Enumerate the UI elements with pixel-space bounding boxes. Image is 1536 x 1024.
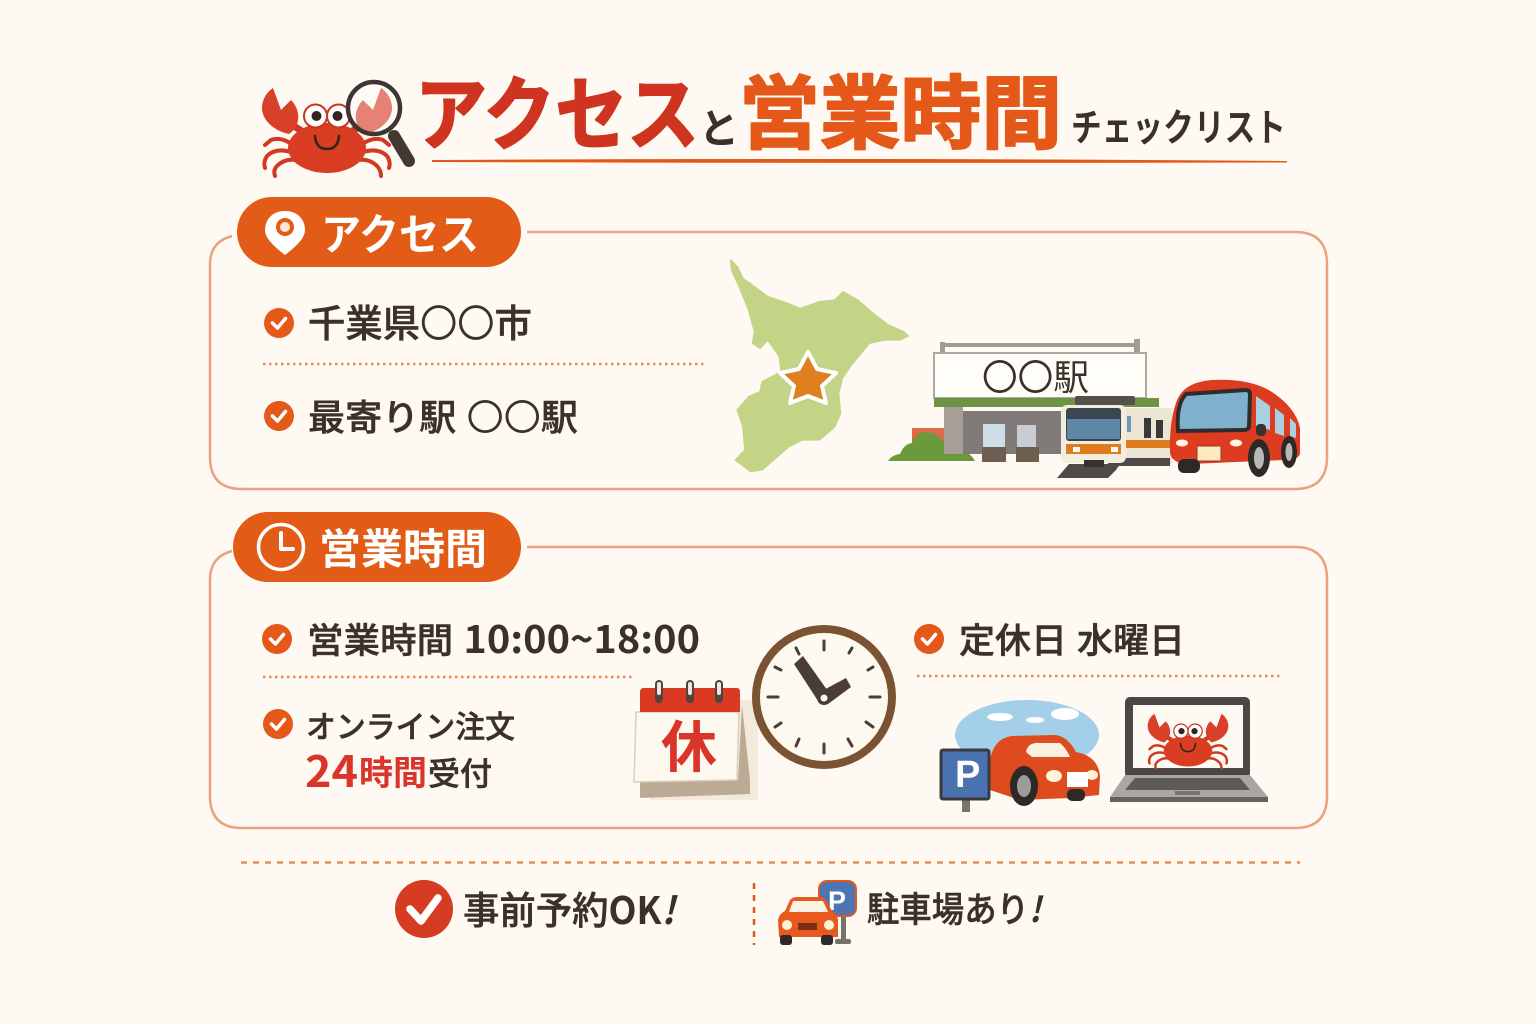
title — [262, 70, 1287, 176]
icon: parking and car — [941, 700, 1100, 812]
icon: closed-day calendar: 休 — [661, 716, 717, 779]
icon: laptop with crab — [1110, 697, 1268, 802]
footer: parking available — [778, 881, 1044, 945]
title text: 営業時間: 営業時間 — [739, 70, 1062, 159]
title text: と: と — [699, 106, 739, 152]
bus illustration — [1170, 380, 1300, 477]
access heading pill — [237, 197, 521, 267]
icon: crab with magnifying glass — [262, 82, 409, 176]
icon: car with parking sign: P — [828, 886, 846, 916]
icon: map pin — [265, 211, 305, 255]
panel: access — [210, 197, 1327, 489]
online orders row — [263, 709, 515, 800]
title text: チェックリスト: チェックリスト — [1071, 108, 1286, 150]
icon: check badge — [395, 880, 453, 938]
advance booking text: 事前予約OK! — [463, 880, 679, 935]
online orders row: 受付 — [428, 756, 492, 792]
opening hours row: 営業時間 10:00~18:00 — [307, 609, 700, 664]
online orders row: 24 — [305, 738, 358, 800]
icon: clock — [258, 524, 304, 570]
icon: car with parking sign — [778, 881, 856, 945]
panel: business hours — [210, 512, 1327, 828]
title text: アクセス: アクセス — [415, 71, 699, 160]
online orders row: 時間 — [359, 755, 427, 793]
footer: advance booking — [395, 880, 679, 938]
business hours heading text: 営業時間 — [319, 526, 487, 573]
station sign text: 〇〇駅 — [982, 357, 1089, 398]
icon: wall clock — [752, 625, 896, 769]
station illustration — [888, 339, 1159, 462]
closed day row: 定休日 水曜日 — [959, 622, 1185, 661]
address row: 千業県〇〇市 — [308, 304, 532, 346]
business hours heading pill — [233, 512, 521, 582]
nearest station row: 最寄り駅 〇〇駅 — [308, 397, 578, 438]
icon: parking and car: P — [955, 754, 980, 796]
access heading text: アクセス — [321, 212, 479, 260]
map: Chiba prefecture with star — [731, 260, 908, 472]
parking available text: 駐車場あり! — [867, 882, 1044, 933]
online orders row: オンライン注文 — [306, 710, 515, 745]
icon: closed-day calendar — [634, 684, 758, 800]
title underline — [432, 159, 1287, 163]
train illustration — [1057, 396, 1172, 478]
